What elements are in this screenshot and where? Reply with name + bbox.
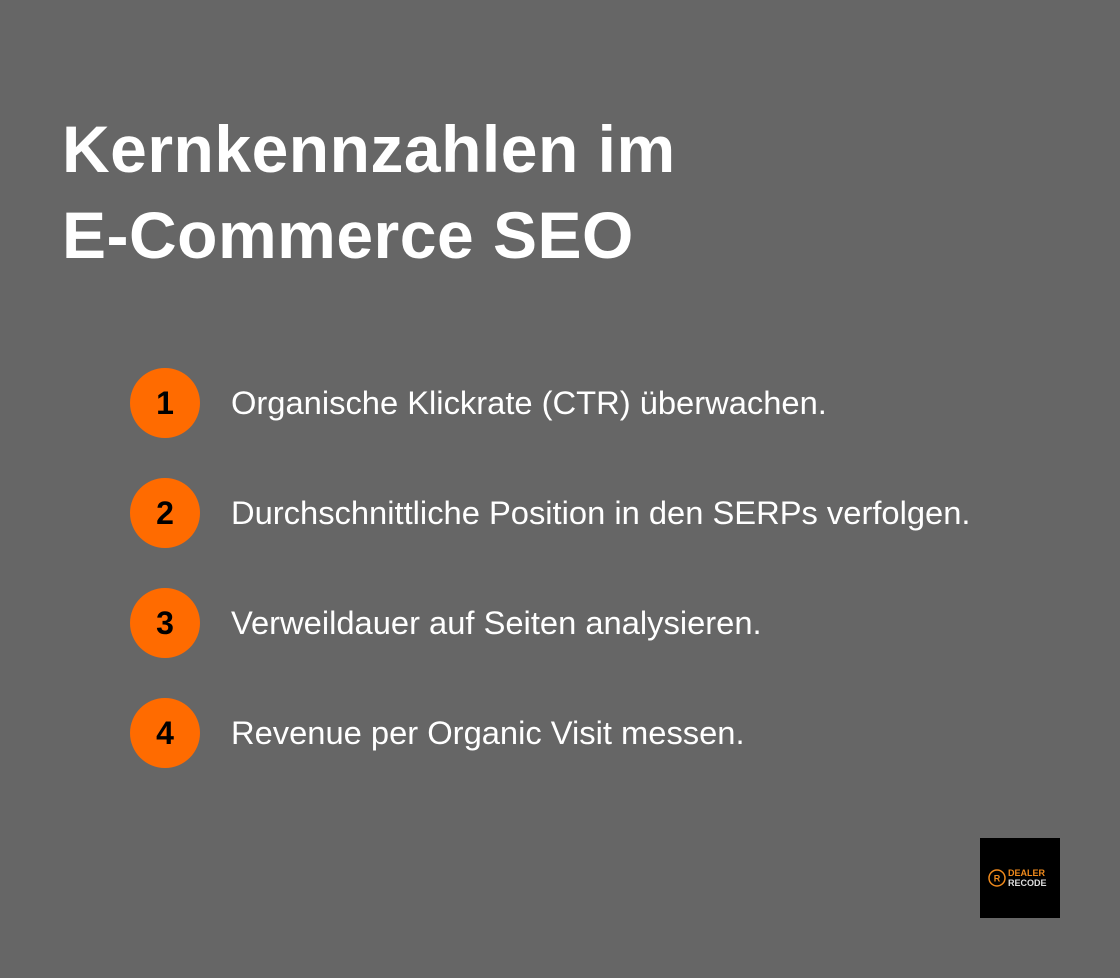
item 1 [130,368,827,438]
item 3: Verweildauer auf Seiten analysieren. [231,604,762,641]
item 2 [130,478,970,548]
item 3 [130,588,762,658]
badge 3: 3 [156,605,174,641]
logo [980,838,1060,918]
title: E-Commerce SEO [62,198,634,272]
badge 3 [130,588,200,658]
badge 4: 4 [156,715,174,751]
badge 1: 1 [156,385,174,421]
item 1: Organische Klickrate (CTR) überwachen. [231,384,827,421]
badge 4 [130,698,200,768]
item 4: Revenue per Organic Visit messen. [231,714,745,751]
item 2: Durchschnittliche Position in den SERPs verfolgen. [231,494,970,531]
item 4 [130,698,745,768]
title [62,112,676,272]
badge 2: 2 [156,495,174,531]
logo: R [994,874,1001,884]
title: Kernkennzahlen im [62,112,676,186]
badge 2 [130,478,200,548]
logo: RECODE [1008,878,1047,888]
badge 1 [130,368,200,438]
logo: DEALER [1008,868,1046,878]
